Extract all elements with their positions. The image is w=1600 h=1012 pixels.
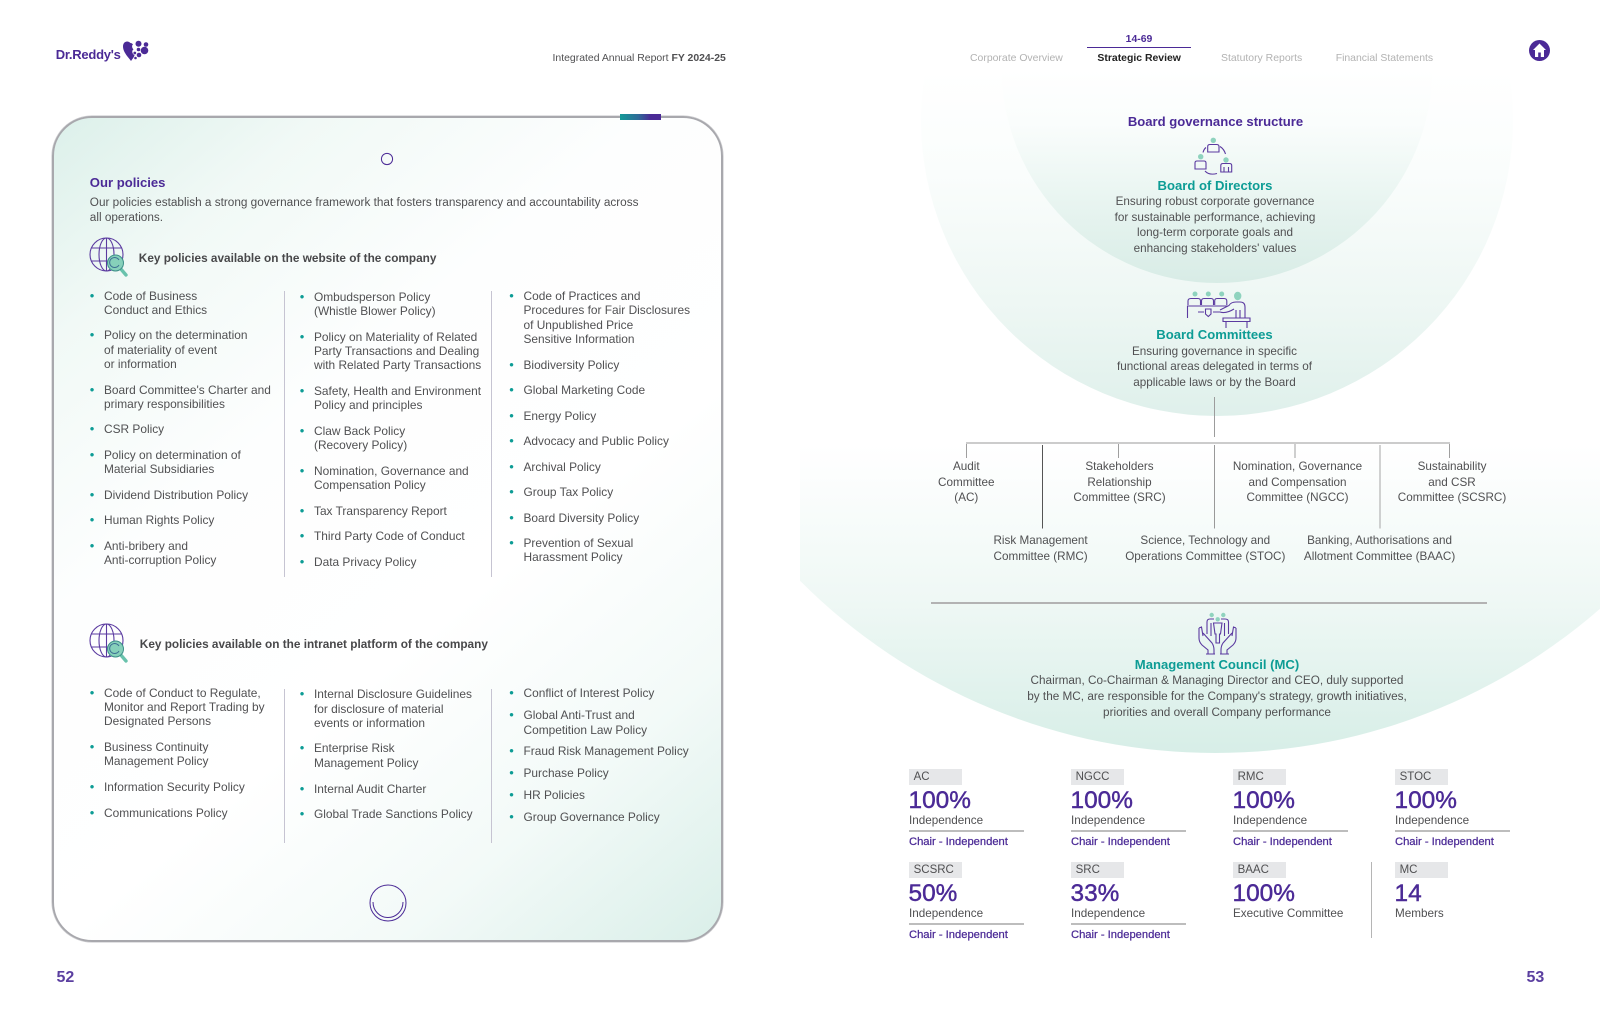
stat: BAAC <box>1232 862 1343 920</box>
tag: STOC <box>1400 771 1431 783</box>
intro text <box>90 196 638 224</box>
tag: MC <box>1400 864 1417 876</box>
policy item: Conduct and Ethics <box>104 303 207 317</box>
nav: Financial Statements: Financial Statements <box>1336 53 1433 64</box>
policy item: Tax Transparency Report <box>314 504 447 518</box>
website policies column 3 <box>510 289 690 564</box>
tag <box>1395 769 1448 784</box>
policy item: for disclosure of material <box>314 702 444 716</box>
text: board of directors description: Ensuring robust corporate governance <box>1116 195 1314 208</box>
divider <box>490 689 492 843</box>
page number 52: 52 <box>56 969 74 986</box>
stat: RMC <box>1232 769 1348 848</box>
policy item: Party Transactions and Dealing <box>314 344 479 358</box>
text: management council description <box>1027 674 1407 718</box>
policy item: (Recovery Policy) <box>314 438 407 452</box>
policy item: CSR Policy <box>104 422 164 436</box>
heading: our policies: Our policies <box>90 175 165 190</box>
policy item <box>524 536 633 565</box>
header: report title: Integrated Annual Report FY 2024-25 <box>552 53 726 64</box>
text: management council description: Chairman, Co-Chairman & Managing Director and CEO, duly supported <box>1031 674 1403 687</box>
tag: SRC <box>1076 864 1100 876</box>
tag <box>1395 862 1448 878</box>
policy item: Group Governance Policy <box>524 810 660 824</box>
stat: MC <box>1394 862 1448 920</box>
policy item: Policy on the determination <box>104 328 247 342</box>
heading: board committees: Board Committees <box>1156 327 1273 342</box>
tag: SCSRC <box>914 864 954 876</box>
value: 100% <box>1232 787 1295 814</box>
policy item <box>524 289 690 346</box>
icon: globe with magnifier <box>89 238 128 277</box>
policy item: Fraud Risk Management Policy <box>524 744 689 758</box>
policy item: Designated Persons <box>104 714 211 728</box>
committee org chart <box>938 397 1506 563</box>
intro text: all operations. <box>90 211 163 224</box>
policy item: Group Tax Policy <box>524 485 613 499</box>
rule <box>909 923 1024 925</box>
value: 100% <box>1232 880 1295 907</box>
connector lines <box>966 397 1450 528</box>
rule <box>1071 830 1186 832</box>
committee: AC <box>938 460 995 504</box>
chair: Chair - Independent <box>909 836 1008 848</box>
committee: RMC: Risk Management <box>993 534 1088 547</box>
policy item: Procedures for Fair Disclosures <box>524 303 690 317</box>
tablet camera circle <box>380 152 394 166</box>
nav: Corporate Overview: Corporate Overview <box>970 53 1063 64</box>
policy item: Purchase Policy <box>524 766 609 780</box>
policy item: Management Policy <box>314 756 418 770</box>
background arcs behind board governance structure <box>800 137 1600 753</box>
policy item <box>104 288 207 317</box>
intro text: Our policies establish a strong governance framework that fosters transparency and accountability across <box>90 196 638 209</box>
committee: STOC: Science, Technology and <box>1140 534 1270 547</box>
heading: management council: Management Council (MC) <box>1135 657 1299 672</box>
stat: STOC <box>1394 769 1510 848</box>
intranet policies column 1 <box>90 686 265 820</box>
policy item: Board Diversity Policy <box>524 510 639 524</box>
policy item <box>104 382 271 411</box>
label: Members <box>1395 907 1444 920</box>
policy item: Communications Policy <box>104 806 228 820</box>
committee: SRC <box>1073 460 1166 504</box>
policy item: Third Party Code of Conduct <box>314 529 465 543</box>
tag <box>1071 862 1124 878</box>
stat: SRC <box>1070 862 1186 941</box>
divider <box>490 291 492 577</box>
policy item: Information Security Policy <box>104 780 245 794</box>
committee: SRC: Committee (SRC) <box>1073 491 1166 504</box>
tag: RMC <box>1238 771 1264 783</box>
tablet home button <box>370 884 406 922</box>
policy item <box>104 740 208 769</box>
text: board of directors description <box>1114 195 1315 255</box>
policy item: Data Privacy Policy <box>314 554 416 568</box>
committee: NGCC: Committee (NGCC) <box>1247 491 1348 504</box>
policy item: of materiality of event <box>104 342 217 356</box>
stat: NGCC <box>1070 769 1186 848</box>
policy item: or information <box>104 357 177 371</box>
policy item: Human Rights Policy <box>104 513 214 527</box>
policy item: Dividend Distribution Policy <box>104 488 248 502</box>
committee: SCSRC: Sustainability <box>1418 460 1486 473</box>
policy item: Material Subsidiaries <box>104 462 214 476</box>
heading: intranet policies: Key policies available on the intranet platform of the company <box>140 636 488 650</box>
committee: BAAC: Banking, Authorisations and <box>1307 534 1452 547</box>
logo heart and dots mark <box>123 40 148 61</box>
committee: SCSRC: and CSR <box>1428 476 1476 489</box>
policy item: Energy Policy <box>524 408 596 422</box>
policy item: Safety, Health and Environment <box>314 384 481 398</box>
value: 100% <box>1070 787 1133 814</box>
nav: Statutory Reports: Statutory Reports <box>1221 53 1302 64</box>
tag: NGCC <box>1076 771 1109 783</box>
heading: website policies: Key policies available on the website of the company <box>139 250 436 264</box>
policy item: Anti-bribery and <box>104 539 188 553</box>
committee: SCSRC <box>1398 460 1506 504</box>
policy item <box>314 741 418 770</box>
policy item: Nomination, Governance and <box>314 464 469 478</box>
policy item <box>314 464 469 492</box>
policy item <box>104 686 265 729</box>
policy item: Archival Policy <box>524 460 601 474</box>
text: board committees description: Ensuring governance in specific <box>1132 345 1297 358</box>
chair: Chair - Independent <box>1395 836 1494 848</box>
text: board of directors description: enhancing stakeholders' values <box>1134 242 1296 255</box>
section divider <box>931 602 1487 604</box>
policy item: Management Policy <box>104 754 208 768</box>
policy item: Conflict of Interest Policy <box>524 686 654 700</box>
icon: globe with magnifier (intranet) <box>89 624 128 663</box>
label: Executive Committee <box>1233 907 1343 920</box>
policy item: Global Anti-Trust and <box>524 708 635 722</box>
divider <box>284 689 285 843</box>
policy item: Harassment Policy <box>524 550 623 564</box>
tag <box>1233 862 1286 878</box>
committee: STOC <box>1125 534 1285 563</box>
chair: Chair - Independent <box>1233 836 1332 848</box>
value: 100% <box>1394 787 1457 814</box>
policy item: Competition Law Policy <box>524 722 647 736</box>
policy item: Monitor and Report Trading by <box>104 700 265 714</box>
policy item: Enterprise Risk <box>314 741 395 755</box>
policy item <box>524 708 647 737</box>
policy item <box>314 330 481 373</box>
label: Independence <box>1233 814 1307 827</box>
rule <box>1071 923 1186 925</box>
policy item: HR Policies <box>524 788 585 802</box>
value: 14 <box>1394 880 1422 907</box>
policy item: events or information <box>314 716 425 730</box>
policy item: Compensation Policy <box>314 478 426 492</box>
text: board of directors description: for sustainable performance, achieving <box>1115 211 1315 224</box>
policy item: Policy and principles <box>314 398 422 412</box>
policy item: Global Marketing Code <box>524 383 645 397</box>
divider <box>284 291 285 577</box>
committee: NGCC <box>1233 460 1362 504</box>
icon: board of directors <box>1194 138 1232 175</box>
committee: SCSRC: Committee (SCSRC) <box>1398 491 1506 504</box>
committee: BAAC: Allotment Committee (BAAC) <box>1304 550 1455 563</box>
policy item <box>104 539 216 568</box>
label: Independence <box>1071 907 1145 920</box>
chair: Chair - Independent <box>1071 929 1170 941</box>
tag <box>909 862 962 878</box>
accent tab <box>620 114 661 120</box>
committee: RMC: Committee (RMC) <box>994 550 1088 563</box>
policy item: Internal Audit Charter <box>314 782 426 796</box>
tag <box>909 769 962 784</box>
policy item: Biodiversity Policy <box>524 358 619 372</box>
icon: home <box>1529 40 1550 61</box>
nav: active underline <box>1087 46 1191 48</box>
committee: NGCC: and Compensation <box>1248 476 1347 489</box>
tag <box>1233 769 1286 784</box>
policy item: Policy on Materiality of Related <box>314 330 477 344</box>
policy item <box>314 290 436 318</box>
stat: AC <box>908 769 1024 848</box>
policy item: of Unpublished Price <box>524 318 633 332</box>
rule <box>1233 830 1348 832</box>
policy item: Business Continuity <box>104 740 208 754</box>
policy item: Anti-corruption Policy <box>104 553 216 567</box>
committee: STOC: Operations Committee (STOC) <box>1125 550 1285 563</box>
committee: SRC: Stakeholders <box>1085 460 1154 473</box>
rule <box>1395 830 1510 832</box>
policy item: Sensitive Information <box>524 332 635 346</box>
policy item <box>104 448 241 477</box>
committee: SRC: Relationship <box>1087 476 1152 489</box>
chair: Chair - Independent <box>1071 836 1170 848</box>
policy item: primary responsibilities <box>104 397 225 411</box>
policy item: Internal Disclosure Guidelines <box>314 687 472 701</box>
navigation tabs <box>970 34 1433 64</box>
policy item <box>104 328 247 371</box>
committee: AC: (AC) <box>954 491 978 504</box>
committee: NGCC: Nomination, Governance <box>1233 460 1362 473</box>
heading: board governance structure: Board governance structure <box>1128 114 1303 128</box>
text: board committees description: functional areas delegated in terms of <box>1117 360 1312 373</box>
tag <box>1071 769 1124 784</box>
value: 33% <box>1070 880 1119 907</box>
stat: SCSRC <box>908 862 1024 941</box>
logo: Dr. Reddy's <box>56 40 148 62</box>
policy item <box>314 424 407 452</box>
nav: page range: 14-69 <box>1126 34 1152 45</box>
policy item: Policy on determination of <box>104 448 241 462</box>
label: Independence <box>1071 814 1145 827</box>
text: board of directors description: long-term corporate goals and <box>1137 226 1293 239</box>
text: board committees description <box>1117 345 1312 389</box>
heading: board of directors: Board of Directors <box>1158 178 1272 192</box>
value: 100% <box>908 787 971 814</box>
policy item: Code of Conduct to Regulate, <box>104 686 261 700</box>
text: management council description: by the MC, are responsible for the Company's strategy, growth initiatives, <box>1027 690 1407 703</box>
tag: AC <box>914 771 930 783</box>
website policies column 2 <box>300 290 481 568</box>
policy item: (Whistle Blower Policy) <box>314 304 436 318</box>
website policies column 1 <box>90 288 271 567</box>
policy item: Code of Practices and <box>524 289 640 303</box>
page number 53: 53 <box>1526 969 1544 986</box>
committee: AC: Audit <box>953 460 980 473</box>
nav: Strategic Review: Strategic Review <box>1097 53 1181 64</box>
icon: management council <box>1198 612 1237 654</box>
policy item: Claw Back Policy <box>314 424 405 438</box>
policy item: Ombudsperson Policy <box>314 290 430 304</box>
text: board committees description: applicable laws or by the Board <box>1133 376 1296 389</box>
policy item: Global Trade Sanctions Policy <box>314 807 473 821</box>
tag: BAAC <box>1238 864 1269 876</box>
icon: board committees <box>1186 292 1251 328</box>
label: Independence <box>1395 814 1469 827</box>
label: Independence <box>909 907 983 920</box>
policy item: Board Committee's Charter and <box>104 382 271 396</box>
policy item: with Related Party Transactions <box>314 358 481 372</box>
panel: our policies <box>52 116 723 942</box>
policy item: Prevention of Sexual <box>524 536 633 550</box>
intranet policies column 3 <box>510 686 689 824</box>
committee: RMC <box>993 534 1088 563</box>
intranet policies column 2 <box>300 687 473 821</box>
value: 50% <box>908 880 957 907</box>
label: Independence <box>909 814 983 827</box>
rule <box>909 830 1024 832</box>
policy item <box>314 384 481 412</box>
stat divider <box>1370 862 1372 938</box>
committee: AC: Committee <box>938 476 995 489</box>
policy item <box>314 687 472 730</box>
logo wordmark: Dr.Reddy's <box>56 46 121 62</box>
policy item: Advocacy and Public Policy <box>524 434 669 448</box>
policy item: Code of Business <box>104 288 197 302</box>
chair: Chair - Independent <box>909 929 1008 941</box>
committee: BAAC <box>1304 534 1455 563</box>
text: management council description: priorities and overall Company performance <box>1103 706 1331 718</box>
